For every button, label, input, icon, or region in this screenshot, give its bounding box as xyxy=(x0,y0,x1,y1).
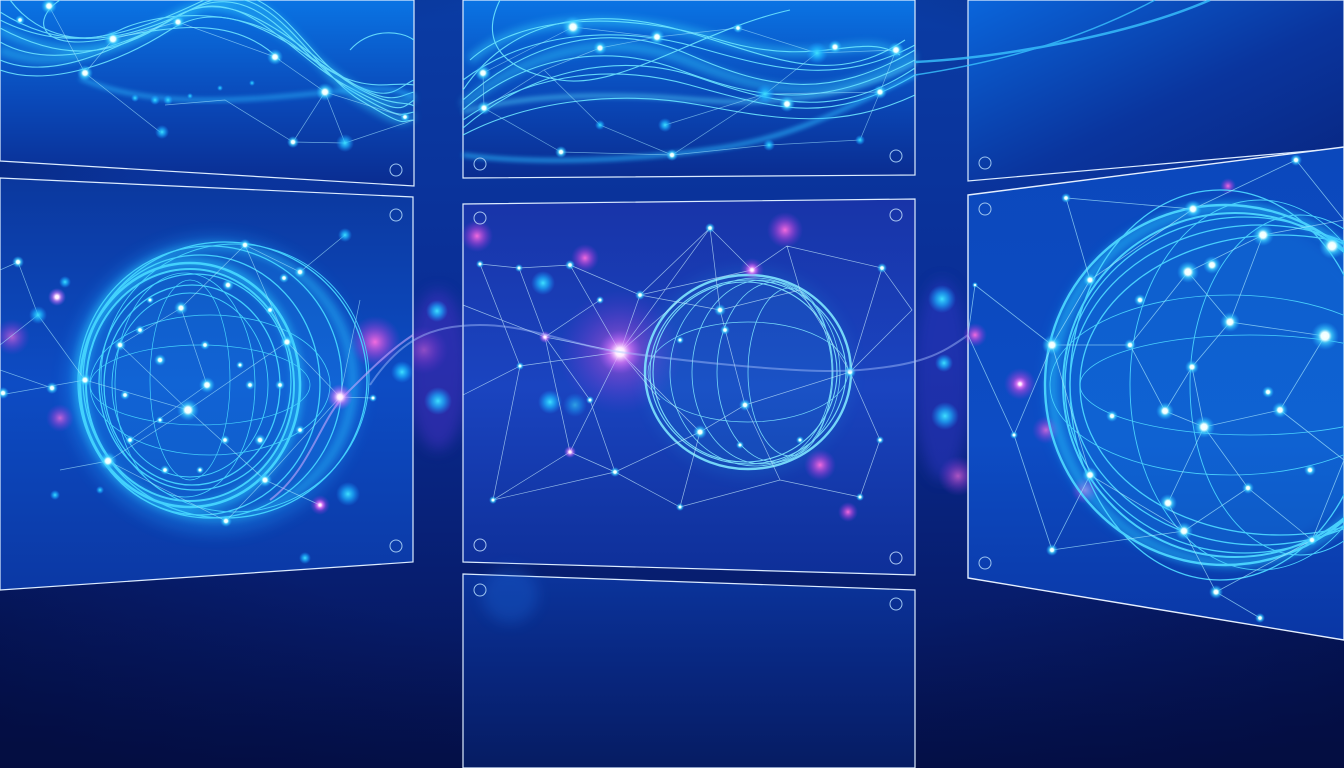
glow blobs xyxy=(0,235,413,535)
corner rings xyxy=(474,584,486,596)
bright center star xyxy=(598,330,642,374)
soft glow xyxy=(482,567,538,623)
ring sphere xyxy=(645,275,851,469)
nodes xyxy=(0,228,377,564)
curve glow xyxy=(463,21,915,105)
nodes xyxy=(972,154,1344,623)
nodes xyxy=(15,0,410,152)
ring glow xyxy=(1052,207,1344,563)
glow band xyxy=(463,75,915,160)
corner rings xyxy=(890,150,902,162)
network lines xyxy=(49,6,414,143)
corner ring xyxy=(979,157,991,169)
panel: middle left xyxy=(0,178,413,590)
panel: middle right xyxy=(963,147,1344,640)
ring sphere xyxy=(1045,190,1344,580)
panel: top right xyxy=(915,0,1344,181)
flowing curves xyxy=(0,0,414,122)
panel: top left xyxy=(0,0,414,186)
nodes xyxy=(476,223,887,511)
glow blobs xyxy=(963,178,1344,560)
corner rings xyxy=(474,212,486,224)
network lines xyxy=(968,160,1344,618)
network lines xyxy=(483,27,896,155)
panel: top center xyxy=(463,0,915,178)
glow blobs xyxy=(461,212,858,522)
nodes xyxy=(475,16,904,161)
gap glow: purple between panels xyxy=(400,280,978,496)
network lines xyxy=(0,235,373,521)
network lines xyxy=(463,228,912,507)
ring glow xyxy=(77,246,353,518)
corner rings xyxy=(390,209,402,221)
panel: middle center xyxy=(461,199,915,575)
corner rings xyxy=(979,203,991,215)
corner ring xyxy=(390,164,402,176)
connecting flow lines xyxy=(370,325,968,385)
panel: bottom center xyxy=(463,567,915,768)
wave lines xyxy=(915,0,1210,75)
flowing curves xyxy=(463,0,915,135)
ring sphere xyxy=(78,242,369,518)
pink flow line xyxy=(270,335,413,500)
curve glow xyxy=(0,0,414,120)
